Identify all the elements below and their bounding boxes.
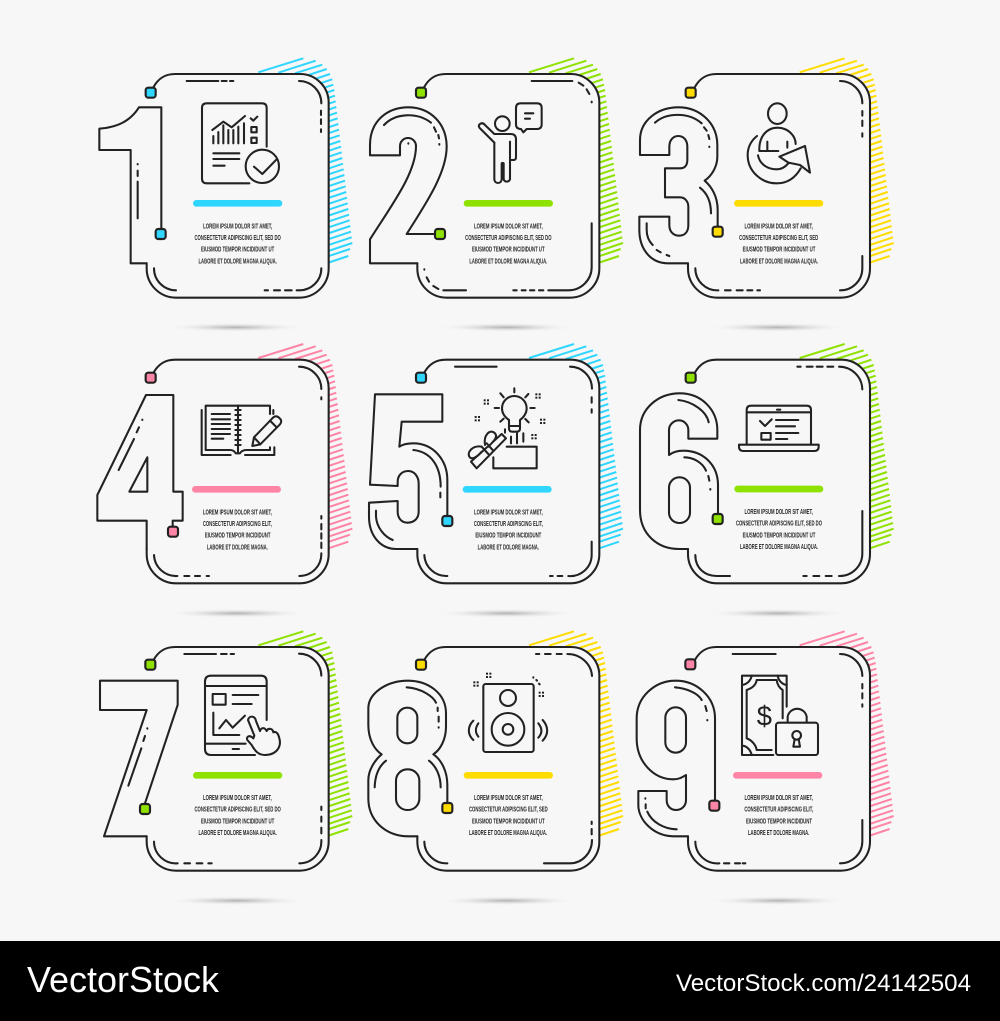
numeral accents [135, 164, 141, 218]
shadow [706, 609, 849, 618]
text block [469, 793, 548, 837]
top node [416, 373, 426, 383]
icon: person with speech bubble [479, 103, 542, 183]
text block: LOREM IPSUM DOLOR SIT AMET, [474, 507, 543, 516]
panel: step 6 [640, 344, 894, 618]
panel: step 5 [369, 344, 623, 618]
text block: CONSECTETUR ADIPISCING ELIT, SED [739, 233, 818, 242]
text block: CONSECTETUR ADIPISCING ELIT, [474, 519, 543, 528]
panel: step 1 [99, 58, 352, 332]
stripes [800, 58, 894, 268]
top node [416, 660, 426, 670]
bottom node [713, 227, 723, 237]
colour bar [463, 486, 552, 493]
numeral 7 [100, 681, 178, 836]
shadow [165, 896, 308, 905]
stripes [800, 631, 894, 841]
frame accents [695, 367, 862, 576]
top node [146, 88, 156, 98]
text block [465, 221, 552, 265]
colour bar [193, 200, 282, 207]
card frame [147, 360, 329, 583]
text block: EIUSMOD TEMPOR INCIDIDUNT [205, 531, 271, 540]
stripes [800, 344, 894, 554]
top node [145, 660, 155, 670]
text block: EIUSMOD TEMPOR INCIDIDUNT [746, 816, 812, 825]
stripes [529, 58, 623, 268]
footer brand: VectorStock [27, 959, 220, 1000]
numeral accents [647, 115, 711, 256]
frame accents [695, 81, 862, 290]
text block [739, 221, 818, 265]
shadow [433, 609, 580, 618]
text block: LABORE ET DOLORE MAGNA. [748, 828, 809, 837]
panel: step 7 [100, 631, 352, 905]
bottom node [709, 801, 719, 811]
text block: EIUSMOD TEMPOR INCIDIDUNT UT [472, 245, 545, 254]
text block: EIUSMOD TEMPOR INCIDIDUNT UT [201, 245, 275, 254]
text block: CONSECTETUR ADIPISCING ELIT, [203, 519, 272, 528]
text block: LABORE ET DOLORE MAGNA ALIQUA. [740, 256, 818, 265]
bottom node [713, 514, 723, 524]
text block: LABORE ET DOLORE MAGNA. [478, 542, 539, 551]
panel: step 2 [370, 58, 623, 332]
shadow [164, 323, 307, 332]
text block: LABORE ET DOLORE MAGNA ALIQUA. [469, 256, 547, 265]
top node [686, 88, 696, 98]
text block: LOREM IPSUM DOLOR SIT AMET, [203, 221, 272, 230]
text block: LOREM IPSUM DOLOR SIT AMET, [744, 507, 813, 516]
colour bar [192, 486, 281, 493]
numeral 6 counter [669, 477, 690, 523]
numeral accents [119, 420, 142, 470]
text block: LABORE ET DOLORE MAGNA ALIQUA. [740, 542, 818, 551]
text block: EIUSMOD TEMPOR INCIDIDUNT UT [743, 245, 816, 254]
numeral 8 upper counter [397, 708, 417, 743]
frame accents [424, 654, 592, 863]
text block: LOREM IPSUM DOLOR SIT AMET, [474, 793, 543, 802]
numeral accents [375, 687, 441, 787]
card frame [688, 360, 870, 583]
icon: laptop checklist [739, 406, 819, 451]
numeral 2 [370, 107, 447, 263]
numeral 4 [97, 395, 183, 549]
shadow [163, 609, 310, 618]
frame accents [424, 367, 592, 576]
icon: banknote and padlock: $ [757, 701, 772, 732]
frame accents [154, 654, 321, 863]
stripes [529, 631, 623, 841]
numeral accents [128, 728, 147, 786]
bottom node [435, 229, 445, 239]
colour bar [734, 200, 823, 207]
card frame [688, 74, 870, 298]
text block [194, 793, 281, 837]
text block: EIUSMOD TEMPOR INCIDIDUNT UT [743, 530, 816, 539]
card frame [147, 74, 329, 298]
colour bar [733, 772, 822, 779]
icon: notebook and pencil [202, 406, 281, 455]
text block: CONSECTETUR ADIPISCING ELIT, SED [469, 805, 548, 814]
card frame [147, 647, 329, 871]
text block: CONSECTETUR ADIPISCING ELIT, [744, 805, 813, 814]
text block: LOREM IPSUM DOLOR SIT AMET, [744, 793, 813, 802]
text block [203, 507, 272, 551]
panel: step 3 [639, 58, 894, 332]
icon: banknote and padlock [742, 676, 818, 755]
text block: LOREM IPSUM DOLOR SIT AMET, [203, 507, 272, 516]
panel: step 9 [637, 631, 894, 905]
text block: LABORE ET DOLORE MAGNA ALIQUA. [469, 828, 547, 837]
numeral accents [678, 400, 710, 490]
text block: LABORE ET DOLORE MAGNA. [207, 542, 268, 551]
shadow [706, 323, 849, 332]
numeral 1 [99, 107, 161, 263]
text block: LOREM IPSUM DOLOR SIT AMET, [474, 221, 543, 230]
top node [685, 659, 695, 669]
card frame [417, 74, 599, 298]
numeral accents [384, 115, 439, 145]
text block [474, 507, 543, 551]
stripes [258, 344, 352, 554]
bottom node [442, 516, 452, 526]
numeral 8 lower counter [396, 769, 419, 810]
numeral 6 [640, 393, 718, 549]
panel: step 4 [97, 344, 352, 618]
text block: LABORE ET DOLORE MAGNA ALIQUA. [198, 256, 277, 265]
text block: CONSECTETUR ADIPISCING ELIT, SED DO [736, 519, 822, 528]
bottom node [140, 804, 150, 814]
text block: CONSECTETUR ADIPISCING ELIT, SED DO [194, 233, 281, 242]
bottom node [442, 803, 452, 813]
numeral 9 counter [665, 707, 686, 753]
numeral 4 counter [129, 457, 147, 492]
icon: light bulb and gift box [469, 388, 545, 468]
icon: tablet chart with hand [205, 676, 280, 755]
top node [416, 88, 426, 98]
bottom node [168, 527, 178, 537]
text block: CONSECTETUR ADIPISCING ELIT, SED DO [194, 805, 281, 814]
bottom node [156, 229, 166, 239]
text block: LOREM IPSUM DOLOR SIT AMET, [744, 221, 813, 230]
top node [146, 373, 156, 383]
text block: LOREM IPSUM DOLOR SIT AMET, [203, 793, 272, 802]
numeral 5 [369, 394, 447, 549]
shadow [435, 323, 578, 332]
card frame [688, 647, 870, 871]
top node [686, 373, 696, 383]
numeral 8 [368, 681, 447, 836]
frame accents [424, 81, 592, 290]
icon: person with rotating arrow [748, 103, 810, 183]
text block: EIUSMOD TEMPOR INCIDIDUNT [475, 531, 542, 540]
numeral 9 [637, 681, 715, 836]
numeral accents [645, 687, 707, 829]
text block: LABORE ET DOLORE MAGNA ALIQUA. [198, 828, 277, 837]
card frame [417, 647, 599, 871]
stripes [258, 631, 352, 841]
text block: EIUSMOD TEMPOR INCIDIDUNT UT [201, 816, 275, 825]
footer url: VectorStock.com/24142504 [676, 970, 971, 997]
text block [736, 507, 822, 551]
numeral accents [376, 450, 441, 540]
frame accents [695, 654, 862, 863]
icon: report with check [202, 103, 279, 183]
stripes [258, 58, 352, 268]
colour bar [734, 486, 823, 492]
text block [744, 793, 813, 837]
colour bar [193, 772, 282, 779]
frame accents [154, 367, 321, 576]
shadow [707, 896, 850, 905]
colour bar [464, 772, 553, 779]
text block [194, 221, 281, 265]
shadow [436, 896, 579, 905]
numeral 3 [639, 107, 718, 263]
frame accents [154, 81, 321, 290]
text block: EIUSMOD TEMPOR INCIDIDUNT UT [472, 816, 545, 825]
footer bar [0, 941, 1000, 1021]
card frame [417, 360, 599, 583]
panel: step 8 [368, 631, 623, 905]
stripes [529, 344, 623, 554]
colour bar [464, 200, 553, 207]
text block: CONSECTETUR ADIPISCING ELIT, SED DO [465, 233, 552, 242]
icon: speaker [469, 673, 547, 752]
